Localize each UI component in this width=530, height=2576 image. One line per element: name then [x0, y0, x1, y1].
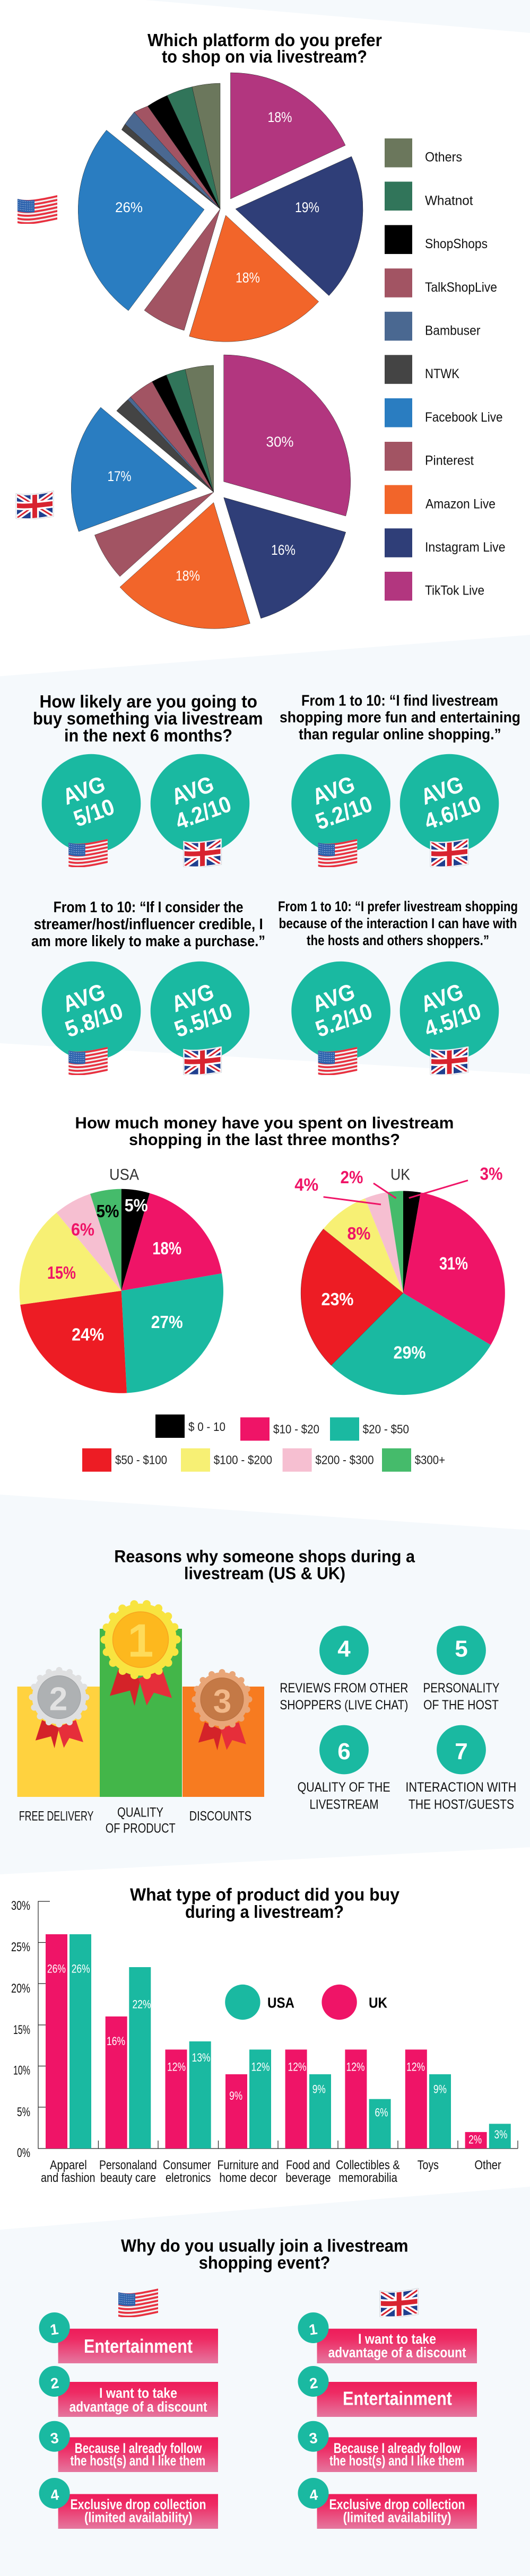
UK reason 4: Exclusive drop collection [329, 2496, 465, 2512]
podium bars [17, 1629, 264, 1797]
pie chart: USA spend: 27% [151, 1312, 183, 1332]
category labels: Other [474, 2158, 501, 2172]
legend: platforms: Pinterest [425, 453, 474, 468]
pie chart: USA spend: 18% [152, 1238, 181, 1258]
USA reason 2: I want to take [99, 2385, 177, 2401]
USA reason 1: 1 [49, 2321, 59, 2338]
heading: interaction with hosts: the hosts and others shoppers.” [307, 932, 489, 948]
legend: USA and UK: UK [369, 1995, 387, 2011]
heading: product type: during a livestream? [185, 1902, 344, 1922]
heading: product type: What type of product did you buy [130, 1885, 400, 1904]
bar value labels: 3% [494, 2128, 507, 2141]
rating: UK 5.5/10 [151, 962, 249, 1076]
pie chart: USA spend: 5% [125, 1195, 148, 1215]
USA reason 2: 2 [49, 2374, 60, 2392]
bars: UK [46, 1934, 487, 2149]
heading: money spent: shopping in the last three months? [129, 1130, 400, 1149]
category labels: Personaland [99, 2158, 157, 2172]
reason 4: SHOPPERS (LIVE CHAT) [280, 1698, 408, 1713]
rating: UK 4.6/10: AVG [418, 772, 467, 810]
heading: product type [130, 1885, 400, 1922]
panel: likelihood ratings [31, 692, 520, 1076]
category labels [41, 2158, 501, 2185]
category labels: beauty care [100, 2171, 156, 2185]
category labels: Collectibles & [336, 2158, 400, 2172]
pie chart: UK platforms [71, 355, 351, 628]
reason 5: PERSONALITY [423, 1681, 500, 1696]
pie labels: USA: 18% [236, 270, 260, 286]
pie labels: UK: 18% [176, 568, 200, 584]
reason 4 [280, 1626, 408, 1713]
reason 7: 7 [455, 1739, 468, 1765]
heading: fun and entertaining [280, 693, 520, 743]
rating: UK 4.2/10 [151, 754, 249, 868]
category labels: eletronics [166, 2171, 211, 2185]
USA reason 4 [39, 2478, 218, 2529]
legend: platforms: Amazon Live [425, 496, 496, 511]
y axis labels: 30% [11, 1899, 30, 1913]
pie chart: USA spend: 5% [97, 1201, 119, 1221]
rating: UK 4.5/10: 4.5/10 [421, 999, 484, 1042]
heading: credible streamer: streamer/host/influencer credible, I [34, 916, 263, 933]
icon: USA flag column [118, 2289, 158, 2318]
legend: platforms [385, 138, 506, 600]
pie labels: UK: 30% [266, 434, 294, 450]
category labels: Food and [286, 2158, 330, 2172]
pie labels: USA: 19% [295, 199, 319, 215]
reason 4: REVIEWS FROM OTHER [280, 1681, 408, 1696]
pie labels: UK [107, 434, 296, 584]
reason 5: OF THE HOST [423, 1698, 499, 1713]
UK reason 3: the host(s) and I like them [329, 2452, 464, 2468]
rating: UK 4.5/10 [400, 962, 499, 1076]
heading: credible streamer [31, 899, 265, 950]
bar value labels: 12% [167, 2060, 186, 2073]
UK reason 4 [298, 2478, 477, 2529]
panel: product types [11, 1885, 518, 2185]
pie chart: USA spend [20, 1189, 223, 1393]
pie labels: USA: 26% [115, 199, 143, 215]
USA reason 3: 3 [49, 2430, 60, 2447]
icon: UK flag column [379, 2288, 419, 2318]
bar value labels: 16% [107, 2034, 125, 2048]
podium labels: FREE DELIVERY [19, 1809, 94, 1823]
icon: silver medal 2 [32, 1670, 86, 1748]
chart axes [38, 1901, 518, 2149]
USA reason 1 [39, 2312, 218, 2363]
y axis labels: 25% [11, 1940, 30, 1954]
reason 6: 6 [337, 1739, 351, 1765]
icon: gold medal 1: 1 [128, 1614, 153, 1667]
label: UK: UK [390, 1166, 410, 1184]
bar value labels: 12% [346, 2060, 365, 2073]
y axis labels: 20% [11, 1981, 30, 1996]
rating: USA 5/10 [42, 754, 141, 868]
rating: UK 5.5/10: AVG [168, 979, 218, 1017]
UK reason 3 [298, 2421, 477, 2472]
heading: platform question: to shop on via livestream? [162, 47, 367, 66]
podium labels [19, 1805, 251, 1836]
category labels: beverage [285, 2171, 331, 2185]
UK reason 4: (limited availability) [343, 2510, 451, 2526]
reason 5 [423, 1626, 500, 1713]
legend: platforms: Instagram Live [425, 540, 506, 555]
legend: USA and UK: USA [267, 1995, 294, 2011]
pie labels: UK: 16% [271, 542, 296, 558]
rating: UK 4.6/10 [400, 754, 499, 868]
bar value labels: 13% [192, 2051, 210, 2064]
heading: why join [121, 2236, 409, 2273]
legend: spend ranges: $20 - $50 [363, 1422, 409, 1436]
panel: money spent [20, 1114, 505, 1472]
legend: spend ranges: $ 0 - 10 [188, 1420, 225, 1434]
legend: platforms: Bambuser [425, 324, 481, 338]
rating: USA 5.2/10 second [291, 962, 390, 1076]
legend: spend ranges: $100 - $200 [214, 1453, 272, 1467]
rating: USA 5.8/10: AVG [59, 979, 109, 1017]
pie labels: USA [115, 109, 319, 286]
USA reason 4: 4 [49, 2486, 60, 2504]
UK reason 1: advantage of a discount [328, 2345, 466, 2361]
pie chart: UK spend: 31% [439, 1253, 468, 1273]
UK reason 2: Entertainment [343, 2388, 452, 2409]
heading: fun and entertaining: From 1 to 10: “I find livestream [301, 693, 498, 710]
pie chart: USA platforms [78, 73, 363, 342]
bar value labels: 12% [406, 2060, 425, 2073]
rating: USA 5.2/10: AVG [309, 772, 358, 810]
UK reason 1 [298, 2312, 477, 2363]
USA reason 3 [39, 2421, 218, 2472]
y axis labels: 15% [13, 2023, 30, 2037]
pie chart: UK spend: 2% [341, 1167, 363, 1187]
heading: fun and entertaining: than regular online shopping.” [299, 726, 501, 743]
pie chart: UK spend: 4% [294, 1175, 318, 1194]
bar value labels: 9% [229, 2089, 242, 2102]
reason 4: 4 [337, 1636, 351, 1662]
rating: UK 4.2/10: 4.2/10 [172, 791, 234, 835]
panel: preferred platforms [15, 30, 506, 628]
USA reason 3: the host(s) and I like them [70, 2452, 205, 2468]
pie labels: USA: 18% [267, 109, 292, 125]
USA reason 3: Because I already follow [75, 2440, 202, 2456]
USA reason 2: advantage of a discount [69, 2399, 207, 2415]
UK reason 1: I want to take [358, 2331, 436, 2347]
podium labels: DISCOUNTS [189, 1809, 251, 1823]
legend: spend ranges: $300+ [415, 1453, 445, 1467]
bar value labels: 6% [375, 2106, 388, 2119]
bar value labels: 22% [133, 1998, 151, 2011]
legend: spend ranges [82, 1414, 445, 1472]
legend: platforms: NTWK [425, 366, 459, 381]
rating: USA 5.2/10: 5.2/10 [312, 791, 376, 835]
heading: why join: Why do you usually join a livestream [121, 2236, 409, 2256]
pie chart: UK spend: 23% [322, 1289, 353, 1309]
category labels: Consumer [163, 2158, 211, 2172]
rating: UK 4.6/10: 4.6/10 [421, 791, 484, 835]
bars: USA [69, 1934, 511, 2149]
UK reason 4: 4 [308, 2486, 319, 2504]
reason 6 [298, 1725, 390, 1812]
heading: likelihood to buy [33, 692, 263, 745]
reason 7: INTERACTION WITH [405, 1780, 516, 1795]
y axis labels: 5% [17, 2105, 30, 2119]
pie chart: USA spend: 6% [71, 1220, 94, 1239]
rating: USA 5.2/10 second: AVG [309, 979, 358, 1017]
heading: credible streamer: From 1 to 10: “If I consider the [54, 899, 244, 916]
icon: bronze medal 3 [195, 1672, 249, 1750]
heading: money spent [75, 1114, 454, 1149]
reason 7 [405, 1725, 516, 1812]
rating: UK 5.5/10: 5.5/10 [171, 998, 236, 1043]
legend: platforms: Whatnot [425, 193, 473, 208]
heading: likelihood to buy: How likely are you going to [39, 692, 257, 711]
pie chart: UK spend: 3% [480, 1164, 503, 1184]
UK reason 3: 3 [308, 2430, 318, 2447]
rating: USA 5/10: AVG [59, 772, 109, 810]
heading: why join: shopping event? [199, 2253, 330, 2273]
icon: gold medal 1 [105, 1604, 177, 1706]
bar value labels: 12% [251, 2060, 270, 2073]
legend: spend ranges: $200 - $300 [315, 1453, 374, 1467]
heading: platform question: Which platform do you prefer [147, 30, 382, 50]
y axis labels [11, 1899, 30, 2160]
heading: interaction with hosts [278, 898, 518, 948]
legend: platforms: Others [425, 150, 462, 165]
heading: reasons: Reasons why someone shops during a [114, 1547, 415, 1566]
heading: likelihood to buy: buy something via livestream [33, 709, 263, 728]
bar value labels: 9% [433, 2082, 447, 2095]
category labels: and fashion [41, 2171, 95, 2185]
category labels: home decor [219, 2171, 277, 2185]
icon: silver medal 2: 2 [49, 1681, 67, 1718]
UK reason 2: 2 [308, 2374, 319, 2392]
USA reason 4: (limited availability) [84, 2510, 192, 2526]
icon: UK flag [15, 491, 54, 519]
rating: USA 5/10: 5/10 [70, 794, 118, 832]
y axis labels: 0% [17, 2146, 30, 2160]
pie labels: UK: 17% [107, 468, 132, 484]
category labels: Furniture and [218, 2158, 279, 2172]
legend: USA and UK [225, 1985, 387, 2020]
category labels: Toys [418, 2158, 439, 2172]
reason 6: QUALITY OF THE [298, 1780, 390, 1795]
heading: reasons: livestream (US & UK) [184, 1564, 345, 1583]
heading: likelihood to buy: in the next 6 months? [64, 726, 232, 745]
heading: money spent: How much money have you spent on livestream [75, 1114, 454, 1132]
category labels: Apparel [50, 2158, 87, 2172]
rating: UK 4.2/10: AVG [168, 772, 218, 810]
legend: spend ranges: $10 - $20 [273, 1422, 319, 1436]
bar value labels: 26% [47, 1962, 66, 1976]
legend: platforms: Facebook Live [425, 410, 503, 425]
USA reason 1: Entertainment [84, 2335, 193, 2357]
legend: spend ranges: $50 - $100 [115, 1453, 167, 1467]
legend: platforms: TalkShopLive [425, 280, 497, 295]
rating: USA 5.8/10: 5.8/10 [62, 998, 126, 1043]
category labels: memorabilia [338, 2171, 398, 2185]
bar value labels: 26% [72, 1962, 90, 1976]
USA reason 4: Exclusive drop collection [70, 2496, 206, 2512]
panel: reasons to shop [17, 1547, 516, 1836]
rating: USA 5.8/10 [42, 962, 141, 1076]
rating: USA 5.2/10 [291, 754, 390, 868]
UK reason 1: 1 [308, 2321, 318, 2338]
heading: reasons [114, 1547, 415, 1583]
label: USA: USA [109, 1166, 139, 1184]
heading: credible streamer: am more likely to make a purchase.” [31, 933, 265, 950]
rating: USA 5.2/10 second: 5.2/10 [312, 999, 376, 1042]
UK reason 2 [298, 2366, 477, 2417]
legend: platforms: ShopShops [425, 237, 488, 251]
UK reason 3: Because I already follow [334, 2440, 461, 2456]
heading: platform question [147, 30, 382, 66]
podium labels: QUALITY [117, 1805, 163, 1820]
panel: why join [39, 2236, 477, 2529]
bar value labels [47, 1962, 507, 2146]
bar value labels: 9% [312, 2082, 326, 2095]
pie chart: USA spend: 24% [72, 1325, 104, 1344]
bar value labels: 2% [468, 2133, 482, 2146]
USA reason 2 [39, 2366, 218, 2417]
podium labels: OF PRODUCT [106, 1821, 176, 1836]
pie chart: UK spend: 29% [394, 1343, 425, 1363]
pie chart: UK spend [294, 1164, 505, 1395]
pie chart: USA spend: 15% [47, 1263, 76, 1282]
y axis labels: 10% [13, 2064, 30, 2078]
reason 5: 5 [455, 1636, 468, 1662]
reason 6: LIVESTREAM [310, 1797, 379, 1812]
icon: bronze medal 3: 3 [213, 1683, 231, 1720]
rating: UK 4.5/10: AVG [418, 979, 467, 1017]
legend: platforms: TikTok Live [425, 583, 484, 598]
bar value labels: 12% [288, 2060, 307, 2073]
icon: USA flag [18, 195, 57, 224]
pie chart: UK spend: 8% [347, 1224, 370, 1243]
